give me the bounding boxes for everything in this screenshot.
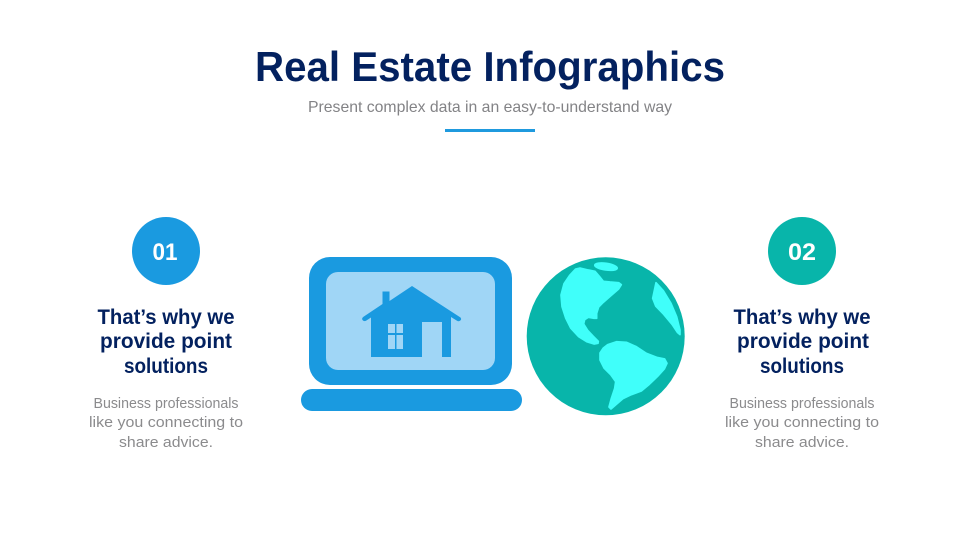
body text 02: share advice. — [755, 434, 849, 451]
globe sphere — [527, 257, 685, 415]
badge 02: 02 — [788, 239, 816, 266]
badge 02 — [768, 217, 836, 285]
body text 02: like you connecting to — [725, 414, 879, 431]
title underline — [445, 129, 535, 132]
body text 01: Business professionals — [94, 395, 238, 412]
panel: right point 02 — [725, 217, 879, 451]
badge 01 — [132, 217, 200, 285]
subtitle: Present complex data in an easy-to-understand way — [308, 99, 672, 116]
body text 01: share advice. — [119, 434, 213, 451]
heading 01: provide point — [100, 330, 232, 353]
house window — [388, 324, 403, 349]
laptop body — [309, 257, 512, 385]
title: Real Estate Infographics — [255, 43, 725, 90]
heading 01: That’s why we — [98, 306, 234, 329]
body text 01: like you connecting to — [89, 414, 243, 431]
heading 01: solutions — [124, 355, 208, 378]
laptop base — [301, 389, 522, 411]
heading 02 — [734, 306, 870, 378]
panel: left point 01 — [89, 217, 243, 451]
icon: laptop with house — [301, 257, 522, 411]
heading 02: solutions — [760, 355, 844, 378]
icon: globe — [527, 257, 685, 415]
body text 02 — [725, 395, 879, 451]
globe continents — [561, 262, 680, 409]
body text 01 — [89, 395, 243, 451]
heading 02: That’s why we — [734, 306, 870, 329]
badge 01: 01 — [152, 239, 178, 266]
icon: house — [362, 286, 461, 357]
laptop screen — [326, 272, 495, 370]
heading 01 — [98, 306, 234, 378]
heading 02: provide point — [737, 330, 869, 353]
body text 02: Business professionals — [730, 395, 874, 412]
